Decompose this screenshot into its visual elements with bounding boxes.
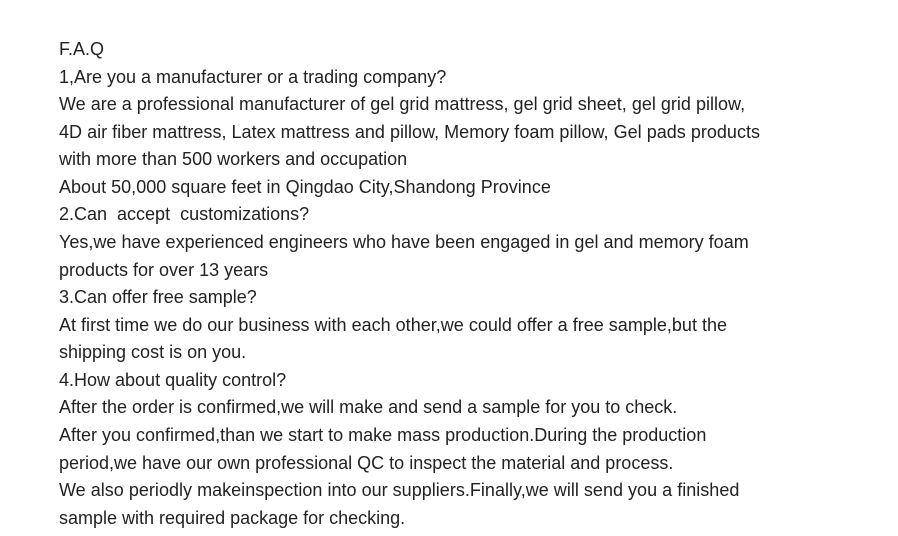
- answer 4 line 2: After you confirmed,than we start to make mass production.During the production: [59, 425, 706, 445]
- answer 4 line 1: After the order is confirmed,we will make and send a sample for you to check.: [59, 397, 677, 417]
- answer 1 line 3: with more than 500 workers and occupation: [59, 149, 407, 169]
- question 1: 1,Are you a manufacturer or a trading company?: [59, 67, 446, 87]
- answer 3 line 1: At first time we do our business with each other,we could offer a free sample,but the: [59, 315, 727, 335]
- answer 3 line 2: shipping cost is on you.: [59, 342, 246, 362]
- answer 4 line 5: sample with required package for checking.: [59, 508, 405, 528]
- question 4: 4.How about quality control?: [59, 370, 286, 390]
- answer 2 line 1: Yes,we have experienced engineers who have been engaged in gel and memory foam: [59, 232, 749, 252]
- answer 1 line 2: 4D air fiber mattress, Latex mattress and pillow, Memory foam pillow, Gel pads products: [59, 122, 760, 142]
- answer 1 line 4: About 50,000 square feet in Qingdao City,Shandong Province: [59, 177, 551, 197]
- answer 1 line 1: We are a professional manufacturer of gel grid mattress, gel grid sheet, gel grid pillow,: [59, 94, 745, 114]
- answer 4 line 4: We also periodly makeinspection into our suppliers.Finally,we will send you a finished: [59, 480, 739, 500]
- answer 4 line 3: period,we have our own professional QC to inspect the material and process.: [59, 453, 673, 473]
- question 2: 2.Can accept customizations?: [59, 204, 309, 224]
- title: F.A.Q: [59, 39, 104, 59]
- answer 2 line 2: products for over 13 years: [59, 260, 268, 280]
- question 3: 3.Can offer free sample?: [59, 287, 257, 307]
